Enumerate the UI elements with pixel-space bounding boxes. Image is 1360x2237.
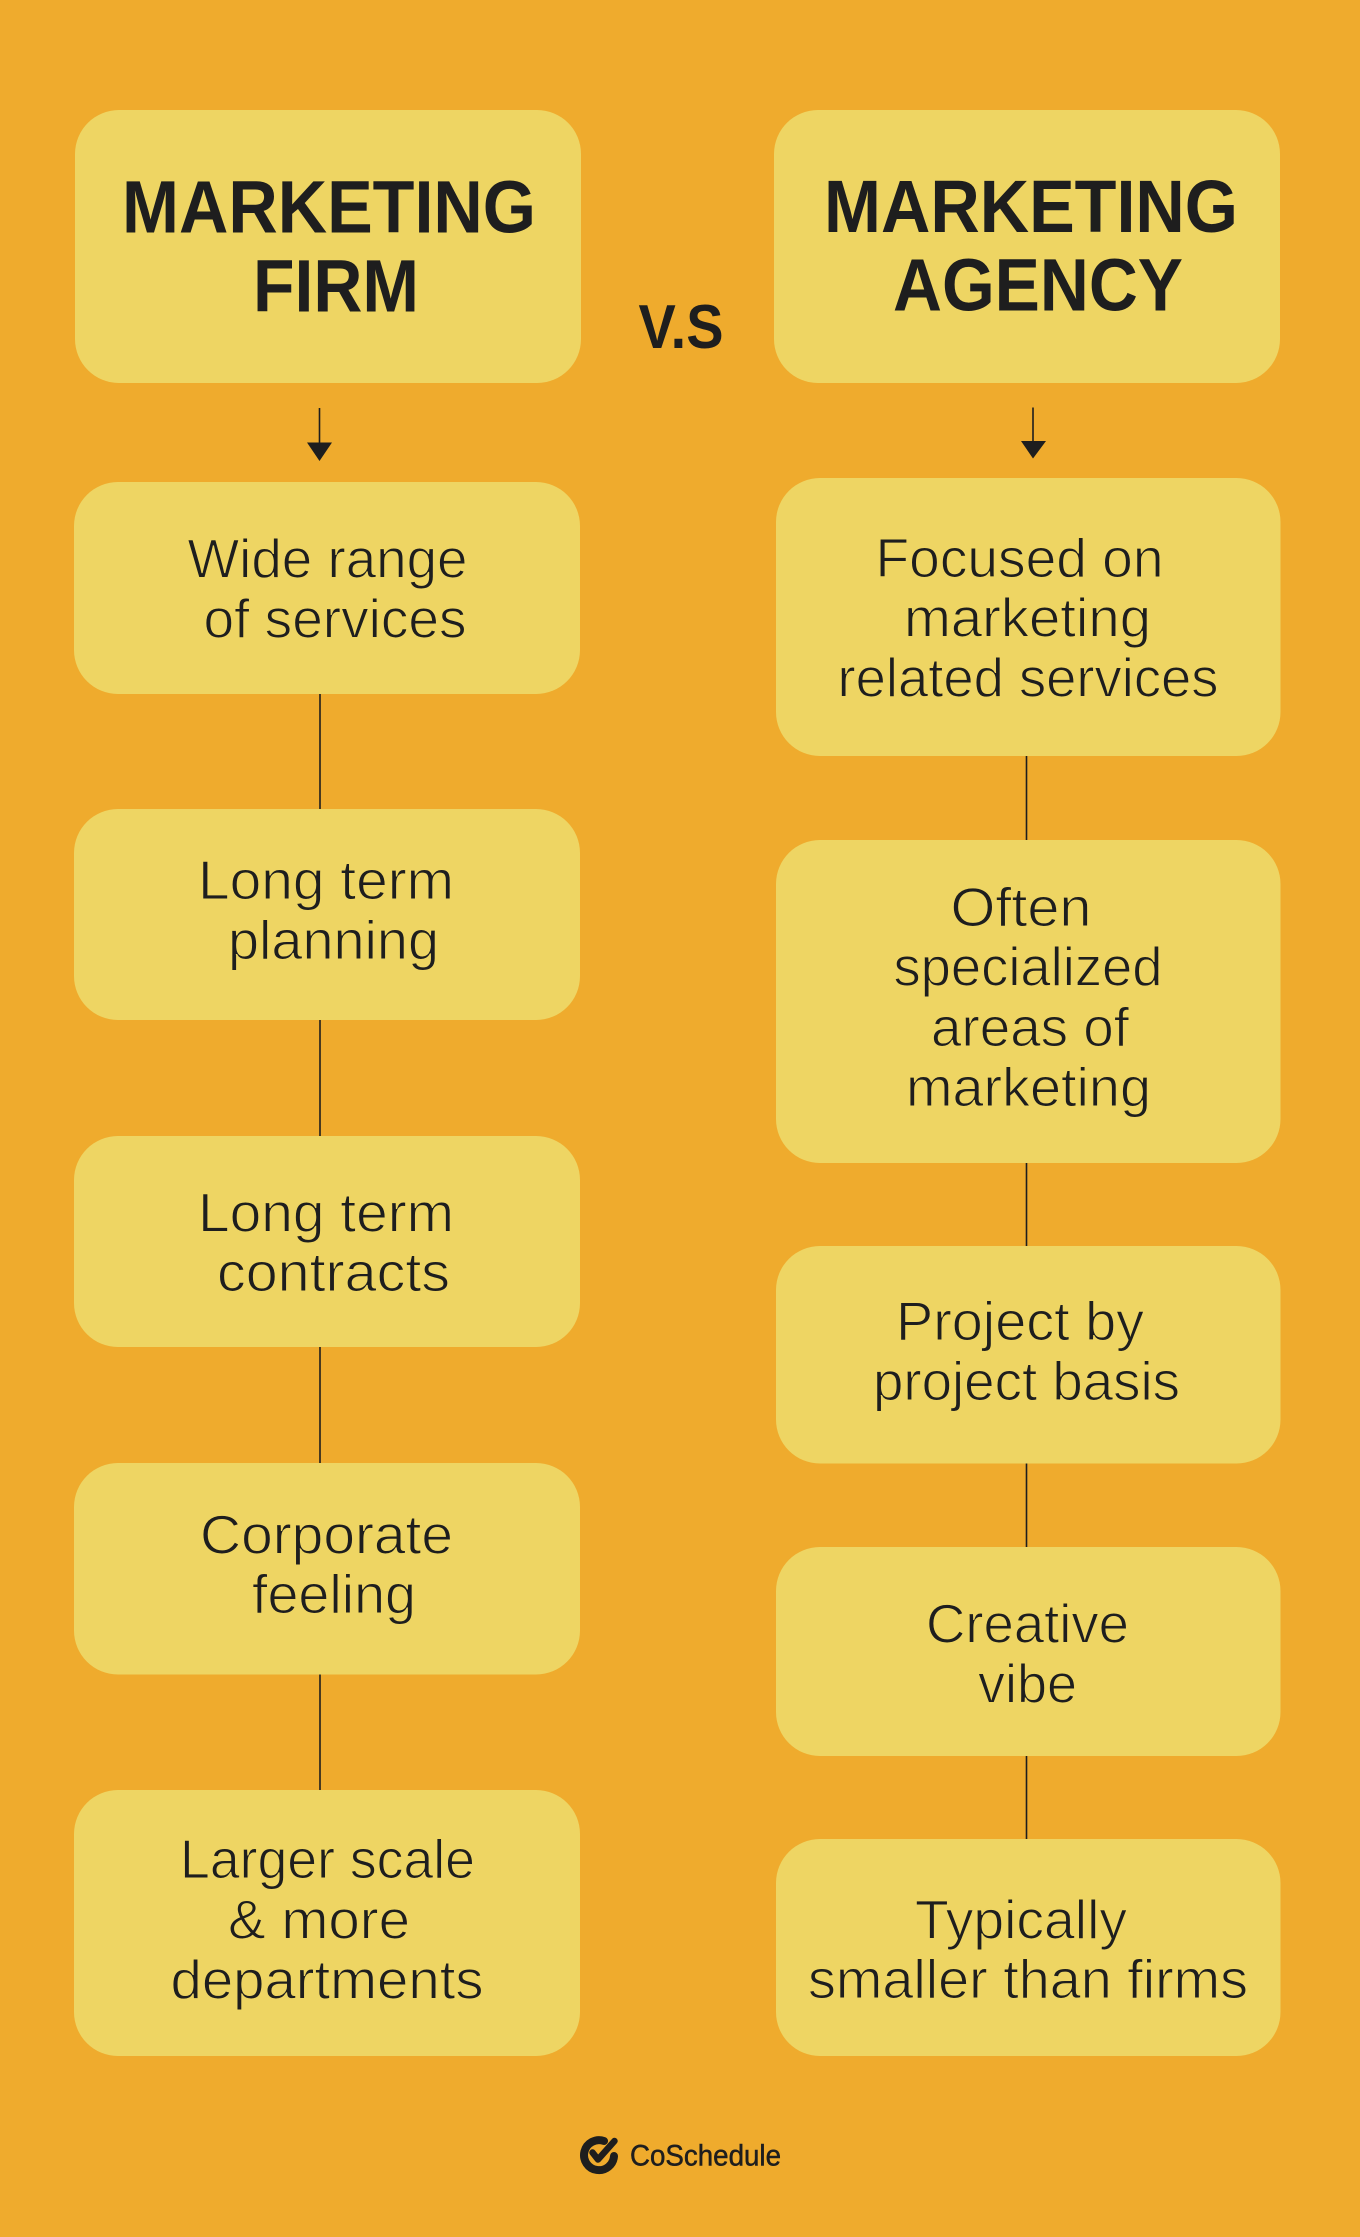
connectors: firm column (319, 693, 321, 1790)
panel: long term planning (74, 809, 580, 1020)
panel: marketing firm header (75, 110, 581, 383)
panel: typically smaller than firms (776, 1839, 1280, 2056)
panel: long term contracts: Long term (198, 1182, 454, 1244)
panel: project by project basis (776, 1246, 1280, 1464)
panel: often specialized areas of marketing: areas of (931, 996, 1130, 1058)
arrow: firm header to first item (307, 408, 332, 461)
panel: focused on marketing related services: related services (838, 646, 1218, 708)
panel: corporate feeling (74, 1463, 580, 1674)
heading: marketing agency: MARKETING (824, 165, 1238, 248)
logo: coschedule (584, 2140, 781, 2172)
panel: often specialized areas of marketing: specialized (894, 936, 1162, 998)
logo wordmark: CoSchedule (630, 2140, 781, 2172)
panel: larger scale and more departments: & more (228, 1888, 410, 1950)
panel: corporate feeling: feeling (252, 1563, 416, 1625)
panel: wide range of services (74, 482, 580, 694)
header box (774, 110, 1280, 383)
panel: project by project basis: Project by (896, 1290, 1145, 1352)
panel: long term planning: Long term (198, 849, 454, 911)
panel: typically smaller than firms: Typically (915, 1888, 1127, 1950)
icon: coschedule check mark (584, 2140, 614, 2170)
panel: larger scale and more departments: Larger scale (180, 1828, 475, 1890)
heading: marketing firm: MARKETING (122, 166, 536, 248)
panel: long term contracts (74, 1136, 580, 1347)
panel: focused on marketing related services: Focused on (876, 527, 1164, 589)
connectors: agency column (1026, 756, 1028, 1839)
panel: typically smaller than firms: smaller than firms (808, 1948, 1248, 2010)
panel: often specialized areas of marketing: marketing (906, 1056, 1151, 1118)
panel: often specialized areas of marketing (776, 840, 1280, 1163)
panel: focused on marketing related services (776, 478, 1280, 756)
heading: marketing firm (122, 166, 536, 328)
panel: wide range of services: Wide range (188, 528, 468, 590)
heading: marketing agency: AGENCY (893, 244, 1183, 326)
panel: creative vibe (776, 1547, 1280, 1756)
panel: wide range of services: of services (204, 588, 466, 650)
heading: marketing agency (824, 165, 1238, 326)
header box (75, 110, 581, 383)
panel: creative vibe: Creative (926, 1592, 1129, 1654)
v.s label: V.S (638, 293, 724, 362)
arrow: agency header to first item (1021, 408, 1046, 458)
panel: creative vibe: vibe (978, 1652, 1077, 1714)
panel: often specialized areas of marketing: Often (950, 876, 1092, 938)
panel: long term contracts: contracts (217, 1241, 450, 1303)
panel: focused on marketing related services: marketing (904, 586, 1151, 648)
panel: marketing agency header (774, 110, 1280, 383)
panel: corporate feeling: Corporate (200, 1504, 453, 1566)
panel: larger scale and more departments (74, 1790, 580, 2056)
panel: long term planning: planning (228, 909, 439, 971)
panel: larger scale and more departments: departments (170, 1948, 484, 2010)
heading: marketing firm: FIRM (253, 244, 419, 328)
panel: project by project basis: project basis (873, 1350, 1180, 1412)
